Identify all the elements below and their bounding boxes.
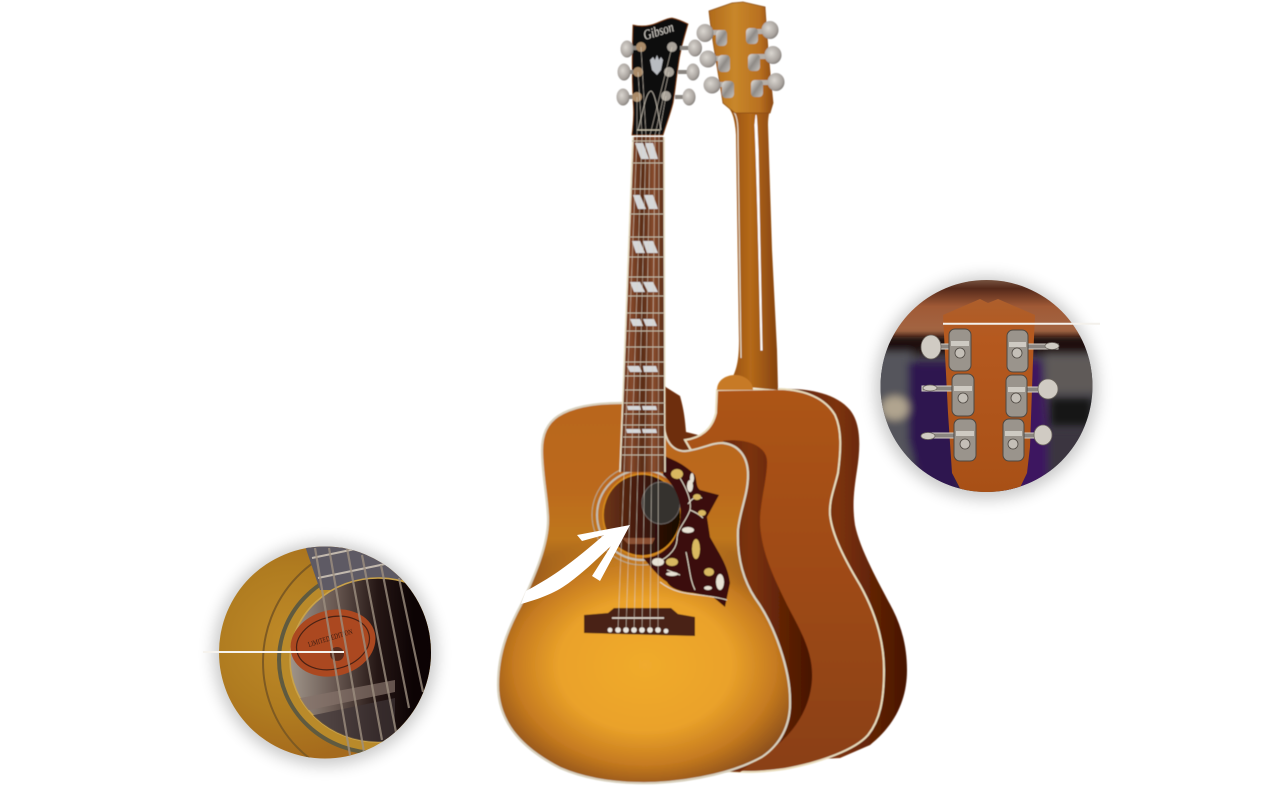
rear body side: [780, 389, 907, 760]
brand logo: Gibson: [642, 20, 676, 44]
guitar rear view: [664, 2, 907, 772]
interior label: LIMITED EDITION: [307, 627, 354, 649]
leader line: [943, 323, 1100, 325]
fretboard end: [306, 546, 402, 590]
close-up strings: [315, 548, 423, 755]
rosette rings: [262, 548, 345, 758]
rear tuners: [696, 21, 784, 98]
tuner headstock back: [943, 299, 1035, 494]
truss rod cover: [638, 91, 661, 130]
front body top: [498, 403, 790, 783]
headstock tuners: [616, 40, 702, 106]
fretboard: [620, 137, 665, 472]
front headstock: [616, 18, 702, 135]
guitar front view: [498, 18, 812, 783]
pickguard floral inlay: [655, 478, 727, 600]
front body side: [700, 440, 812, 772]
rear headstock: [709, 2, 773, 113]
detail photo: label: [219, 546, 431, 758]
detail photo: tuners: [880, 280, 1092, 492]
soundhole rosette: [592, 465, 692, 565]
bridge: [584, 608, 695, 636]
callout: soundhole label detail: [203, 536, 444, 772]
soundhole interior: [289, 577, 431, 743]
rear body waist rim behind front cutaway: [664, 386, 702, 470]
leader line: [203, 651, 344, 653]
fretboard inlays: [626, 143, 658, 433]
pickguard: [643, 455, 730, 607]
callout: headstock tuners detail: [870, 275, 1100, 500]
infographic canvas: [203, 0, 1105, 785]
rear body plate: [685, 389, 884, 772]
arrow pointing to soundhole: [521, 525, 630, 604]
interior label: [290, 609, 376, 677]
neck heel: [717, 375, 753, 390]
strings: [618, 47, 672, 630]
interior label: [642, 482, 680, 524]
crown inlay: [650, 55, 663, 75]
rear neck: [717, 103, 778, 390]
